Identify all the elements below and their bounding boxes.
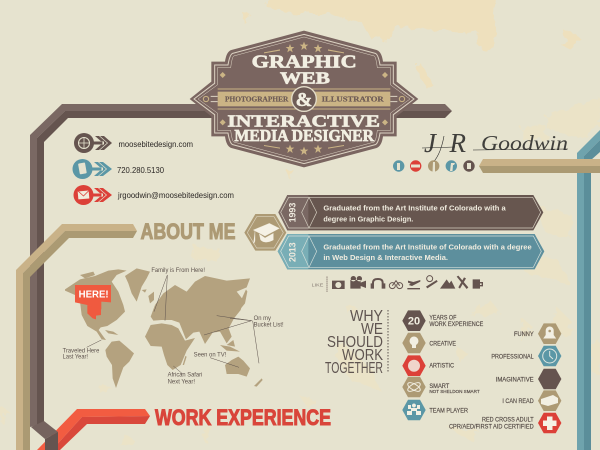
left labels: SMART	[429, 383, 449, 390]
annotation lines	[87, 275, 259, 374]
world map	[63, 267, 284, 388]
timeline: 1993: 1993	[287, 203, 297, 222]
tan bar right	[479, 159, 600, 173]
why we should work together: WE	[361, 321, 383, 338]
contact: email: jrgoodwin@moosebitedesign.com	[117, 190, 234, 200]
annotation text: Seen on TV!	[194, 351, 227, 358]
ampersand	[292, 87, 316, 111]
annotation text: Bucket List!	[254, 321, 284, 328]
ribbon: PHOTOGRAPHER	[225, 96, 289, 104]
heading text: MEDIA DESIGNER	[234, 126, 374, 145]
teal line	[577, 130, 600, 450]
icon: mug	[473, 279, 483, 289]
why we should work together: WHY	[350, 308, 383, 325]
icon: bike	[389, 281, 403, 289]
annotation text: Next Year!	[168, 378, 195, 385]
icon: mountains	[440, 279, 455, 289]
right labels	[449, 331, 534, 430]
contact: phone	[72, 159, 164, 179]
timeline: 2013	[278, 234, 544, 269]
tan line	[16, 224, 137, 450]
icon: camera	[332, 281, 345, 289]
annotation text: On my	[254, 315, 272, 322]
left labels: CREATIVE	[429, 341, 456, 348]
icon: airplane	[407, 280, 420, 289]
signature: Goodwin	[481, 131, 568, 155]
contact: website: moosebitedesign.com	[118, 139, 193, 149]
right hexagons	[538, 323, 561, 433]
icon: headphones	[371, 278, 385, 289]
annotation text	[63, 267, 284, 385]
ampersand: &	[296, 89, 312, 111]
heading text: INTERACTIVE	[227, 111, 380, 130]
badge	[190, 31, 418, 167]
brown line	[30, 104, 452, 450]
like row: LIKE	[312, 283, 324, 289]
left labels: TEAM PLAYER	[429, 407, 468, 414]
social icons	[393, 160, 475, 172]
icon: video camera	[350, 276, 366, 289]
timeline: 1993: degree in Graphic Design.	[323, 214, 413, 223]
ribbon	[203, 89, 405, 109]
signature	[422, 128, 568, 165]
heading text: GRAPHIC	[252, 52, 357, 72]
left labels: YEARS OF	[429, 314, 456, 321]
right labels: FUNNY	[514, 331, 534, 338]
continents	[65, 268, 263, 388]
badge stars	[220, 42, 388, 155]
right labels: RED CROSS ADULT	[482, 417, 534, 424]
icon: racket	[426, 280, 438, 288]
here flag: HERE!	[79, 290, 109, 301]
left labels	[429, 314, 483, 414]
why we should work together: WORK	[342, 347, 384, 364]
left hexagons: 20	[408, 316, 420, 328]
annotation text: Traveled Here	[63, 347, 100, 354]
heading text: WEB	[280, 68, 330, 87]
heading: about me: ABOUT ME	[140, 219, 236, 244]
contact: website	[74, 133, 193, 153]
right labels: IMAGINATIVE	[496, 376, 534, 383]
red work experience line	[37, 409, 150, 450]
icon: graduation cap	[244, 214, 286, 251]
left labels: WORK EXPERIENCE	[429, 321, 483, 328]
why we should work together: TOGETHER	[325, 360, 383, 377]
like row	[312, 276, 483, 293]
here flag	[75, 285, 111, 319]
why we should work together: SHOULD	[327, 334, 383, 351]
icon: kayak	[457, 276, 468, 289]
right labels: CPR/AED/FIRST AID CERTIFIED	[449, 423, 534, 430]
contact: email	[74, 185, 234, 205]
ribbon: ILLUSTRATOR	[322, 96, 385, 104]
right labels: I CAN READ	[502, 398, 534, 405]
annotation text: Last Year!	[63, 354, 88, 361]
annotation text: African Safari	[168, 372, 202, 379]
right labels: PROFESSIONAL	[491, 353, 534, 360]
left hexagons	[402, 310, 426, 420]
heading text	[227, 52, 380, 145]
why we should work together	[325, 308, 388, 377]
timeline: 2013: in Web Design & Interactive Media.	[323, 253, 448, 262]
timeline: 1993: Graduated from the Art Institute of Colorado with a	[323, 204, 506, 213]
heading: work experience: WORK EXPERIENCE	[155, 405, 331, 430]
signature: J R	[424, 128, 466, 158]
left labels: ARTISTIC	[429, 363, 454, 370]
contact: phone: 720.280.5130	[117, 165, 164, 175]
left labels: NOT SHELDON SMART	[429, 389, 480, 394]
timeline: 2013: Graduated from the Art Institute of Colorado with a degree	[323, 242, 532, 251]
annotation text: Family is From Here!	[151, 267, 205, 274]
timeline: 2013: 2013	[287, 242, 297, 262]
timeline: 1993	[278, 195, 543, 230]
